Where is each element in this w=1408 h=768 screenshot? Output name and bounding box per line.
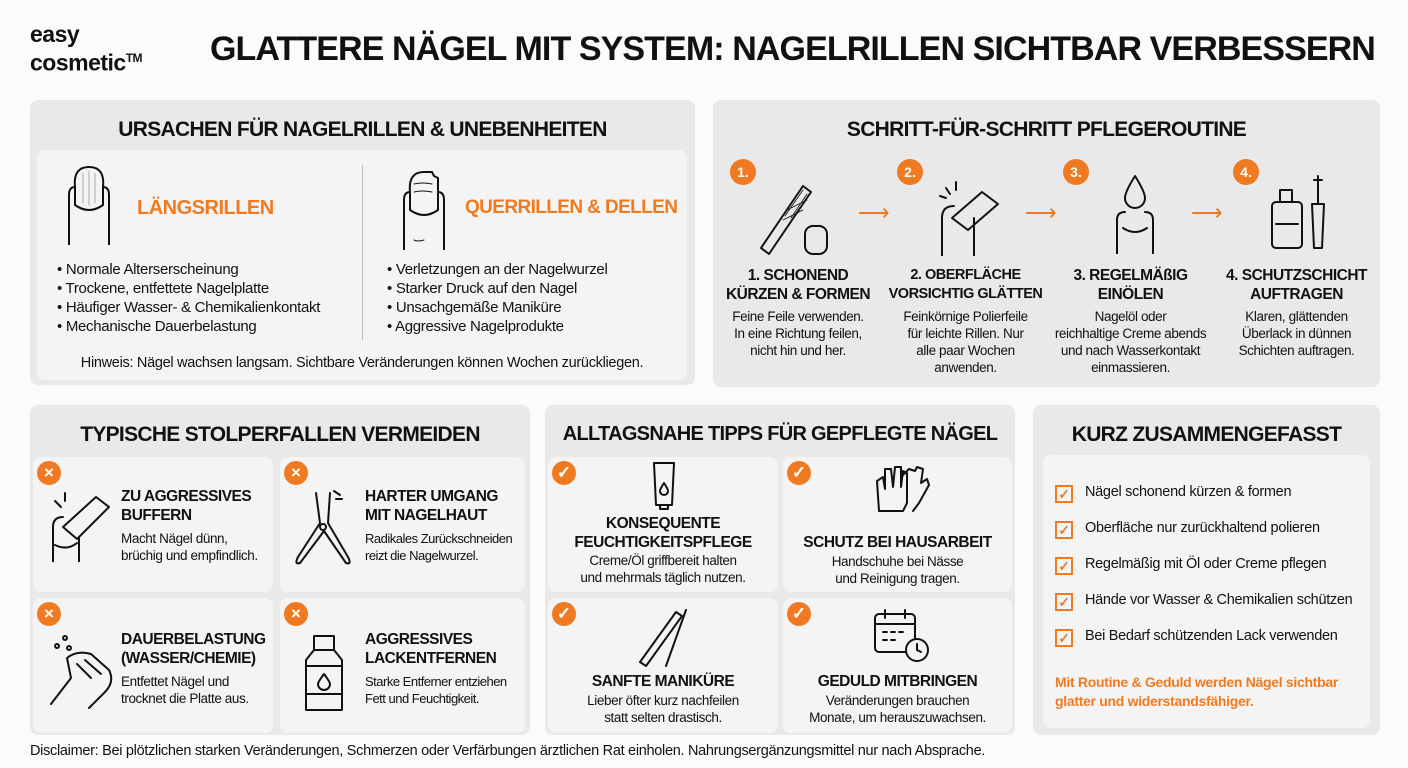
list: Längsrillen: • Normale Alterserscheinung: [57, 261, 238, 278]
card: gloves: [783, 457, 1012, 592]
card: gloves: Handschuhe bei Nässe: [832, 554, 963, 569]
card: patience: ✓: [792, 604, 806, 623]
card: patience: GEDULD MITBRINGEN: [818, 673, 977, 690]
step 2: 2. OBERFLÄCHE: [910, 267, 1021, 283]
logo: [30, 21, 142, 76]
step 3: 3.: [1070, 164, 1082, 180]
step 2: VORSICHTIG GLÄTTEN: [889, 286, 1042, 302]
logo: cosmeticTM: [30, 50, 142, 76]
note: Hinweis: Nägel wachsen langsam. Sichtbare Veränderungen können Wochen zurückliegen.: [81, 355, 643, 371]
card: water: (WASSER/CHEMIE): [121, 650, 256, 667]
step 4: [1226, 159, 1368, 358]
card: cuticle: Radikales Zurückschneiden: [365, 531, 512, 546]
step 2: anwenden.: [934, 360, 997, 375]
step 3: 3. REGELMÄßIG: [1073, 267, 1188, 284]
checklist: ✓: [1058, 594, 1070, 610]
card: buffing: brüchig und empfindlich.: [121, 548, 258, 563]
card: gentle manicure: SANFTE MANIKÜRE: [592, 673, 734, 690]
step 4: Klaren, glättenden: [1245, 309, 1348, 324]
checklist: ✓: [1058, 522, 1070, 538]
card: moisture: ✓: [557, 463, 571, 482]
step 4: AUFTRAGEN: [1250, 286, 1343, 303]
card: cuticle: reizt die Nagelwurzel.: [365, 548, 478, 563]
card: moisture: FEUCHTIGKEITSPFLEGE: [574, 534, 752, 551]
card: cuticle: HARTER UMGANG: [365, 488, 498, 505]
card: gloves: ✓: [792, 463, 806, 482]
panel: pitfalls: [30, 405, 530, 735]
list: Längsrillen: [57, 261, 320, 335]
heading: summary: KURZ ZUSAMMENGEFASST: [1072, 423, 1341, 446]
panel: causes: [30, 100, 695, 385]
card: gentle manicure: ✓: [557, 604, 571, 623]
list: Längsrillen: • Trockene, entfettete Nagelplatte: [57, 280, 269, 297]
list: Querrillen: • Unsachgemäße Maniküre: [387, 299, 561, 316]
card: gloves: und Reinigung tragen.: [835, 571, 960, 586]
card: water: trocknet die Platte aus.: [121, 691, 249, 706]
card: cuticle: ×: [291, 463, 301, 482]
arrow: ⟶: [858, 200, 890, 225]
card: buffing: ×: [44, 463, 54, 482]
step 3: [1055, 159, 1206, 375]
disclaimer: Disclaimer: Bei plötzlichen starken Veränderungen, Schmerzen oder Verfärbungen ärztlichen Rat einholen. Nahrungsergänzungsmittel nur nach Absprache.: [30, 743, 985, 759]
step 1: nicht hin und her.: [750, 343, 846, 358]
step 1: In eine Richtung feilen,: [734, 326, 862, 341]
card: patience: [783, 598, 1012, 733]
card: gloves: SCHUTZ BEI HAUSARBEIT: [803, 534, 992, 551]
card: patience: Monate, um herauszuwachsen.: [809, 710, 986, 725]
card: buffing: [33, 457, 273, 592]
card: cuticle: MIT NAGELHAUT: [365, 507, 487, 524]
step 3: und nach Wasserkontakt: [1061, 343, 1200, 358]
list: Querrillen: • Verletzungen an der Nagelwurzel: [387, 261, 608, 278]
list: Längsrillen: • Häufiger Wasser- & Chemikalienkontakt: [57, 299, 320, 316]
card: water: [33, 598, 273, 733]
card: remover: [280, 598, 525, 733]
title: GLATTERE NÄGEL MIT SYSTEM: NAGELRILLEN SICHTBAR VERBESSERN: [210, 30, 1375, 68]
list: Querrillen: • Starker Druck auf den Nagel: [387, 280, 577, 297]
step 3: einmassieren.: [1091, 360, 1170, 375]
card: causes: [37, 150, 687, 380]
step 1: 1.: [737, 164, 749, 180]
card: buffing: Macht Nägel dünn,: [121, 531, 228, 546]
checklist: Nägel schonend kürzen & formen: [1085, 484, 1291, 500]
card: remover: Fett und Feuchtigkeit.: [365, 691, 479, 706]
conclusion: [1055, 674, 1338, 709]
checklist: ✓: [1058, 630, 1070, 646]
conclusion: glatter und widerstandsfähiger.: [1055, 693, 1253, 709]
heading: pitfalls: TYPISCHE STOLPERFALLEN VERMEIDEN: [80, 423, 480, 446]
arrow: ⟶: [1191, 200, 1223, 225]
step 1: Feine Feile verwenden.: [732, 309, 864, 324]
card: moisture: und mehrmals täglich nutzen.: [580, 570, 746, 585]
card: moisture: [548, 457, 778, 592]
card: summary list: [1043, 455, 1370, 728]
step 4: 4. SCHUTZSCHICHT: [1226, 267, 1367, 284]
conclusion: Mit Routine & Geduld werden Nägel sichtbar: [1055, 674, 1338, 690]
card: buffing: ZU AGGRESSIVES: [121, 488, 251, 505]
card: gentle manicure: Lieber öfter kurz nachfeilen: [587, 693, 739, 708]
card: patience: Veränderungen brauchen: [826, 693, 969, 708]
icon: finger transverse ridges: [403, 171, 445, 250]
card: cuticle: [280, 457, 525, 592]
step 1: [726, 159, 870, 358]
step 2: Feinkörnige Polierfeile: [903, 309, 1028, 324]
card: buffing: BUFFERN: [121, 507, 192, 524]
list: Querrillen: • Aggressive Nagelprodukte: [387, 318, 564, 335]
heading: tips: ALLTAGSNAHE TIPPS FÜR GEPFLEGTE NÄGEL: [563, 423, 997, 445]
step 4: 4.: [1240, 164, 1252, 180]
heading: routine: SCHRITT-FÜR-SCHRITT PFLEGEROUTINE: [847, 118, 1246, 141]
icon: finger lengthwise ridges: [68, 166, 110, 245]
step 4: Überlack in dünnen: [1242, 326, 1351, 341]
logo: easy: [30, 21, 79, 47]
card: remover: AGGRESSIVES: [365, 631, 472, 648]
step 3: Nagelöl oder: [1095, 309, 1166, 324]
checklist: Regelmäßig mit Öl oder Creme pflegen: [1085, 556, 1326, 572]
step 2: für leichte Rillen. Nur: [907, 326, 1024, 341]
step 1: 1. SCHONEND: [748, 267, 848, 284]
step 2: [888, 159, 1042, 375]
step 3: reichhaltige Creme abends: [1055, 326, 1206, 341]
card: moisture: KONSEQUENTE: [606, 515, 720, 532]
panel: summary: [1033, 405, 1380, 735]
checklist: [1055, 484, 1352, 647]
heading: causes: URSACHEN FÜR NAGELRILLEN & UNEBENHEITEN: [118, 118, 607, 141]
card: water: Entfettet Nägel und: [121, 674, 229, 689]
card: remover: Starke Entferner entziehen: [365, 674, 507, 689]
step 3: EINÖLEN: [1098, 286, 1163, 303]
card: remover: ×: [291, 604, 301, 623]
step 4: Schichten auftragen.: [1239, 343, 1354, 358]
step 2: 2.: [904, 164, 916, 180]
label: Querrillen: QUERRILLEN & DELLEN: [465, 197, 677, 218]
card: moisture: Creme/Öl griffbereit halten: [589, 553, 737, 568]
checklist: Oberfläche nur zurückhaltend polieren: [1085, 520, 1320, 536]
card: remover: LACKENTFERNEN: [365, 650, 496, 667]
card: water: ×: [44, 604, 54, 623]
arrow: ⟶: [1025, 200, 1057, 225]
checklist: Bei Bedarf schützenden Lack verwenden: [1085, 628, 1338, 644]
list: Querrillen: [387, 261, 608, 335]
panel: routine: [713, 100, 1380, 387]
card: gentle manicure: statt selten drastisch.: [604, 710, 722, 725]
panel: tips: [545, 405, 1015, 735]
label: Längsrillen: LÄNGSRILLEN: [137, 197, 274, 219]
step 1: KÜRZEN & FORMEN: [726, 286, 870, 303]
checklist: ✓: [1058, 486, 1070, 502]
checklist: Hände vor Wasser & Chemikalien schützen: [1085, 592, 1352, 608]
card: water: DAUERBELASTUNG: [121, 631, 266, 648]
list: Längsrillen: • Mechanische Dauerbelastung: [57, 318, 256, 335]
card: gentle manicure: [548, 598, 778, 733]
step 2: alle paar Wochen: [916, 343, 1015, 358]
checklist: ✓: [1058, 558, 1070, 574]
